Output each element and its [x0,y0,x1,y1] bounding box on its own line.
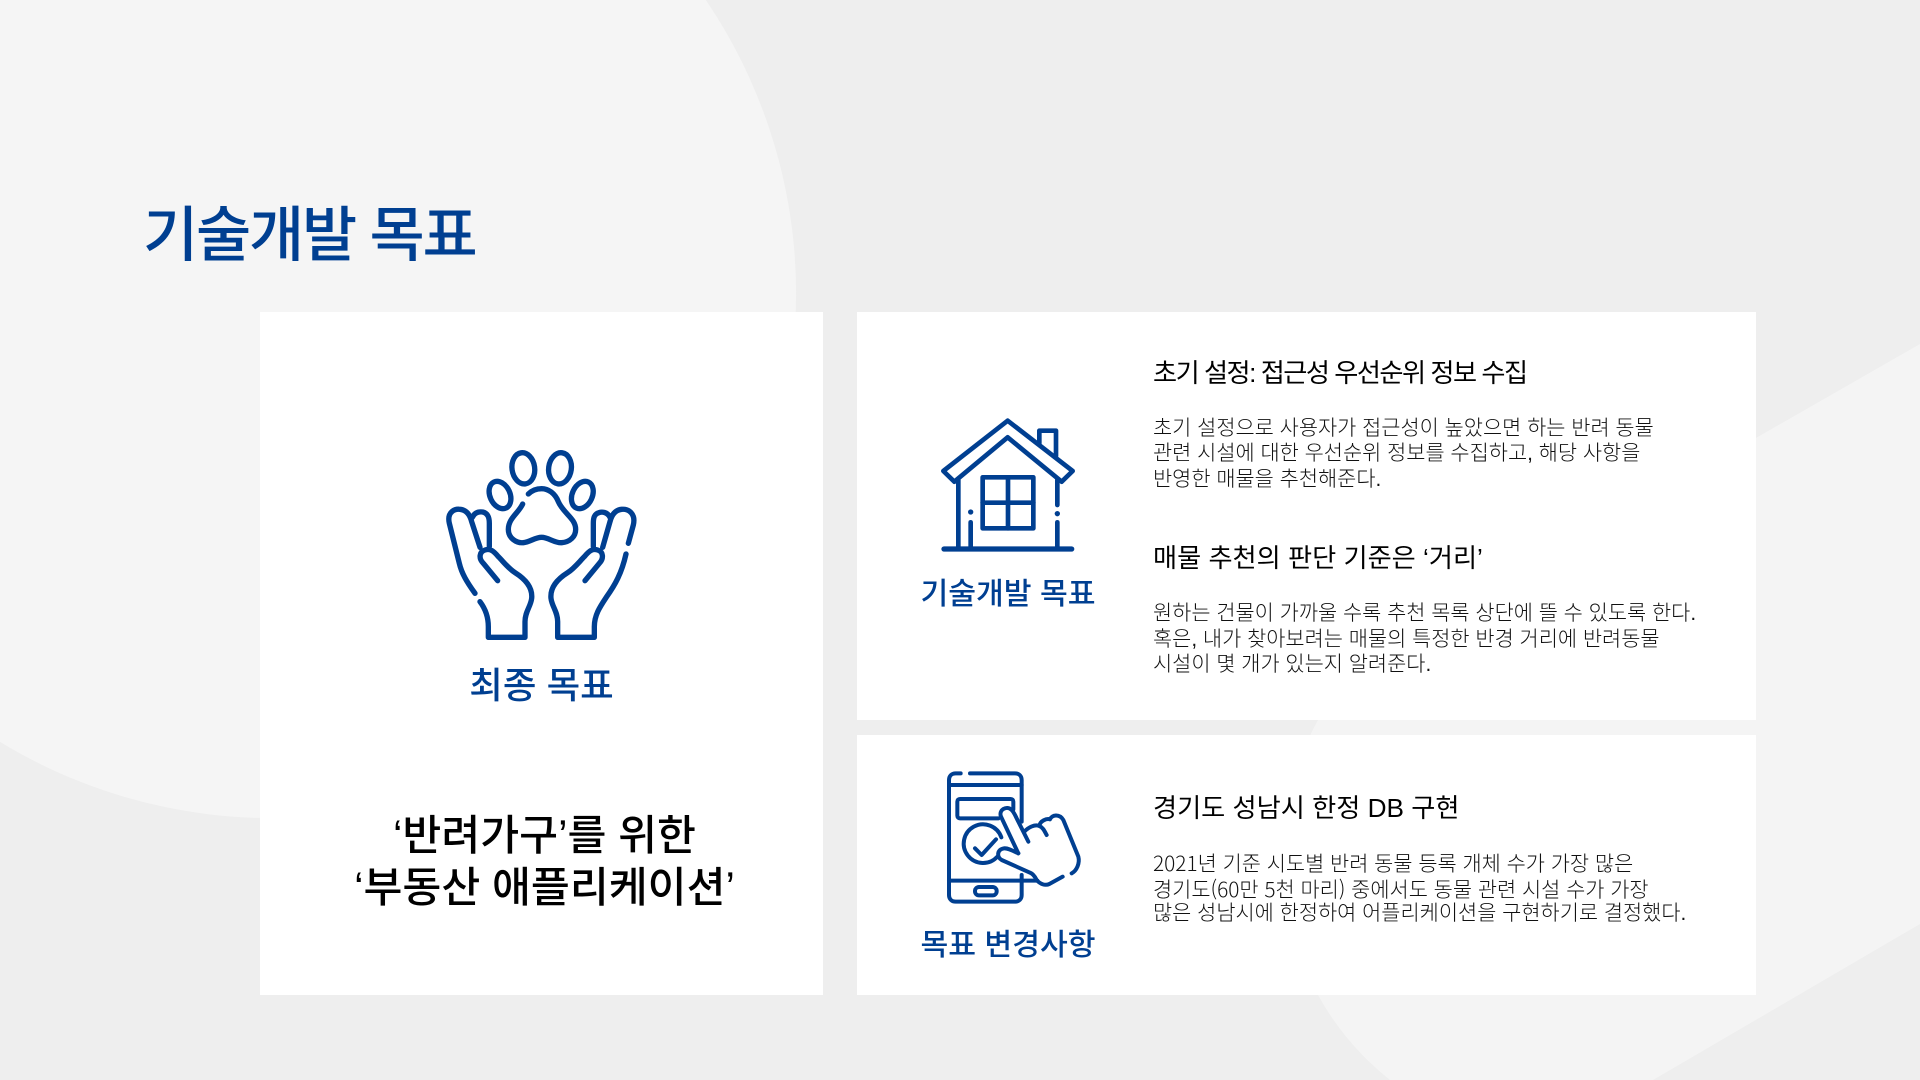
text: limited DB [1153,848,1686,925]
text: initial settings: 초기 설정으로 사용자가 접근성이 높았으면 하는 반려 동물 [1153,416,1654,440]
label: development goals: 기술개발 목표 [920,578,1096,611]
text: initial settings: 반영한 매물을 추천해준다. [1153,468,1381,491]
main statement: ‘부동산 애플리케이션’ [354,864,735,910]
title: 기술개발 목표 [143,202,475,269]
text: distance criterion: 혹은, 내가 찾아보려는 매물의 특정한 반경 거리에 반려동물 [1153,628,1660,651]
heading: distance criterion: 매물 추천의 판단 기준은 ‘거리’ [1153,543,1483,573]
label: goal changes: 목표 변경사항 [920,928,1096,962]
panel: final goal [260,312,823,995]
text: limited DB: 경기도(60만 5천 마리) 중에서도 동물 관련 시설 수가 가장 [1153,874,1649,904]
panel: goal changes [857,735,1756,995]
main statement [354,812,735,910]
text: limited DB: 2021년 기준 시도별 반려 동물 등록 개체 수가 가장 많은 [1153,848,1633,878]
heading: limited DB: 경기도 성남시 한정 DB 구현 [1153,793,1459,823]
text: initial settings: 관련 시설에 대한 우선순위 정보를 수집하고, 해당 사항을 [1153,442,1640,465]
text: distance criterion: 시설이 몇 개가 있는지 알려준다. [1153,653,1431,676]
text: distance criterion: 원하는 건물이 가까울 수록 추천 목록 상단에 뜰 수 있도록 한다. [1153,602,1696,625]
icon: house [941,418,1075,552]
icon: phone and hand [946,771,1081,904]
main statement: ‘반려가구’를 위한 [393,812,696,858]
panel: development goals [857,312,1756,720]
text: limited DB: 많은 성남시에 한정하여 어플리케이션을 구현하기로 결정했다. [1153,902,1686,925]
heading: initial settings: 초기 설정: 접근성 우선순위 정보 수집 [1153,358,1527,388]
label: final goal: 최종 목표 [469,664,614,706]
text: initial settings [1153,416,1654,491]
text: distance criterion [1153,602,1696,676]
icon: hands holding paw [446,450,637,640]
